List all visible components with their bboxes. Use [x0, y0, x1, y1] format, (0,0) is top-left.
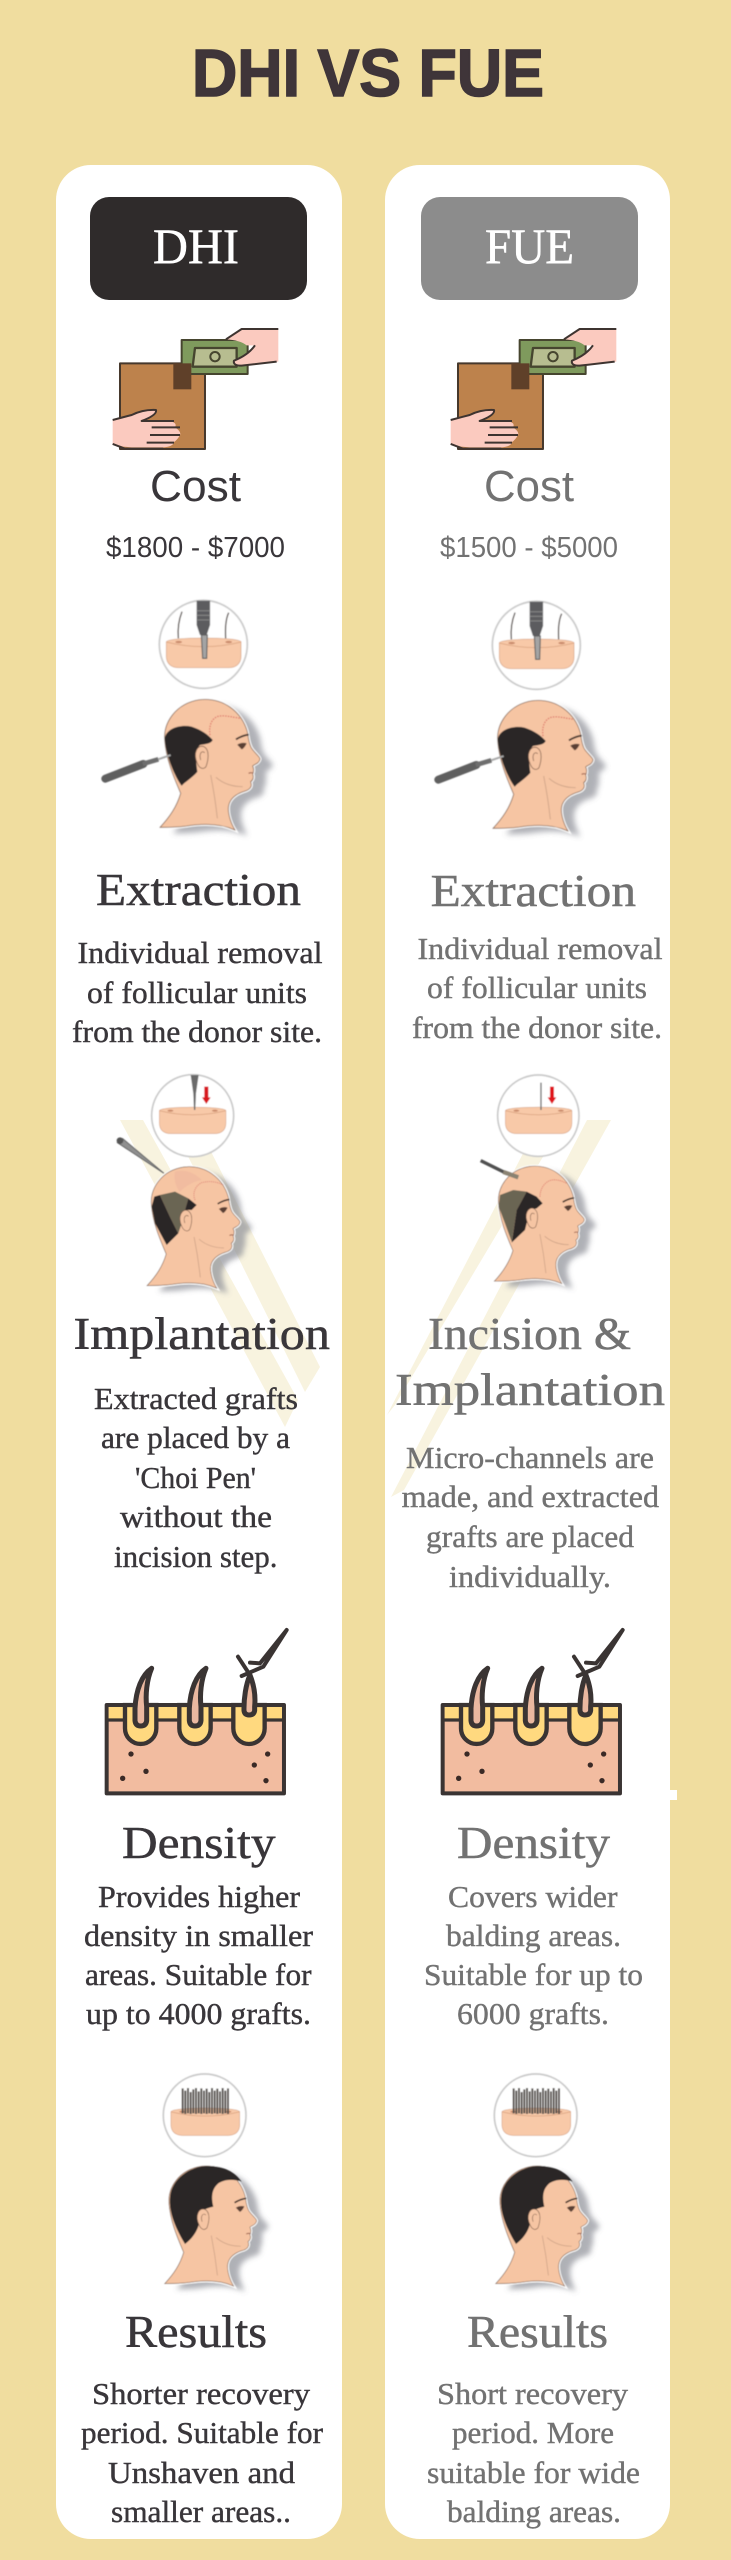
- price range: $1500 - $5000: [440, 532, 618, 564]
- text: extraction description: [72, 935, 322, 1049]
- text: implantation description: 'Choi Pen': [135, 1460, 256, 1495]
- text: density description: areas. Suitable for: [85, 1957, 312, 1992]
- text: results description: [427, 2376, 640, 2529]
- FUE header pill: [421, 197, 638, 300]
- text: results description: [81, 2376, 324, 2529]
- icon: cost box and money: [451, 329, 616, 449]
- DHI header pill: DHI: [153, 218, 239, 274]
- illustration: results: [163, 2074, 268, 2292]
- icon: cost box and money: [113, 329, 278, 449]
- heading: density: Density: [457, 1818, 611, 1868]
- heading: incision and implantation: Implantation: [395, 1365, 665, 1415]
- text: extraction description: Individual removal: [78, 935, 322, 970]
- text: results description: Unshaven and: [108, 2455, 296, 2490]
- text: extraction description: of follicular units: [87, 975, 307, 1010]
- text: density description: density in smaller: [84, 1918, 314, 1953]
- heading: implantation: Implantation: [74, 1309, 330, 1359]
- illustration: extraction: [438, 601, 606, 837]
- heading: incision and implantation: [395, 1309, 665, 1415]
- text: density description: [84, 1879, 314, 2031]
- text: extraction description: Individual removal: [418, 931, 662, 966]
- text: incision description: Micro-channels are: [406, 1440, 654, 1475]
- illustration: extraction: [105, 600, 273, 836]
- text: density description: Provides higher: [98, 1879, 301, 1914]
- text: results description: balding areas.: [447, 2494, 621, 2529]
- text: density description: balding areas.: [446, 1918, 621, 1953]
- illustration: results: [494, 2074, 599, 2292]
- heading: density: Density: [122, 1818, 276, 1868]
- title: DHI VS FUE: [192, 36, 544, 111]
- heading: incision and implantation: Incision &: [428, 1309, 631, 1359]
- heading: results: Results: [125, 2307, 267, 2357]
- text: extraction description: [412, 931, 662, 1045]
- text: results description: Shorter recovery: [92, 2376, 311, 2411]
- illustration: implantation: [117, 1075, 252, 1294]
- text: implantation description: without the: [120, 1499, 272, 1534]
- text: results description: period. More: [452, 2415, 614, 2450]
- text: extraction description: from the donor site.: [72, 1014, 322, 1049]
- icon: hair follicle density: [443, 1630, 623, 1793]
- text: results description: smaller areas..: [111, 2494, 291, 2529]
- price range: $1800 - $7000: [106, 532, 285, 564]
- text: density description: 6000 grafts.: [457, 1996, 609, 2031]
- text: density description: Covers wider: [448, 1879, 618, 1914]
- panel: DHI: [56, 165, 342, 2539]
- text: incision description: made, and extracted: [402, 1479, 660, 1514]
- text: density description: up to 4000 grafts.: [86, 1996, 311, 2031]
- heading: cost: Cost: [150, 462, 241, 511]
- text: implantation description: incision step.: [114, 1539, 278, 1574]
- text: implantation description: are placed by a: [101, 1420, 290, 1455]
- text: results description: suitable for wide: [427, 2455, 640, 2490]
- heading: cost: Cost: [484, 462, 574, 511]
- text: implantation description: [94, 1381, 298, 1574]
- text: implantation description: Extracted grafts: [94, 1381, 298, 1416]
- text: results description: Short recovery: [437, 2376, 629, 2411]
- panel: FUE: [385, 165, 677, 2539]
- text: extraction description: of follicular units: [427, 970, 647, 1005]
- heading: extraction: Extraction: [431, 866, 636, 916]
- heading: results: Results: [467, 2307, 608, 2357]
- heading: extraction: Extraction: [96, 865, 301, 915]
- text: density description: [424, 1879, 643, 2031]
- text: results description: period. Suitable for: [81, 2415, 324, 2450]
- text: incision description: grafts are placed: [426, 1519, 634, 1554]
- watermark: FUE: [387, 1120, 611, 1497]
- text: incision description: [402, 1440, 660, 1594]
- illustration: incision and implantation: [481, 1075, 596, 1289]
- text: density description: Suitable for up to: [424, 1957, 643, 1992]
- icon: hair follicle density: [107, 1630, 287, 1793]
- text: incision description: individually.: [449, 1559, 611, 1594]
- FUE header pill: FUE: [485, 218, 574, 274]
- DHI header pill: [90, 197, 307, 300]
- watermark: DHI: [120, 1120, 320, 1427]
- text: extraction description: from the donor site.: [412, 1010, 662, 1045]
